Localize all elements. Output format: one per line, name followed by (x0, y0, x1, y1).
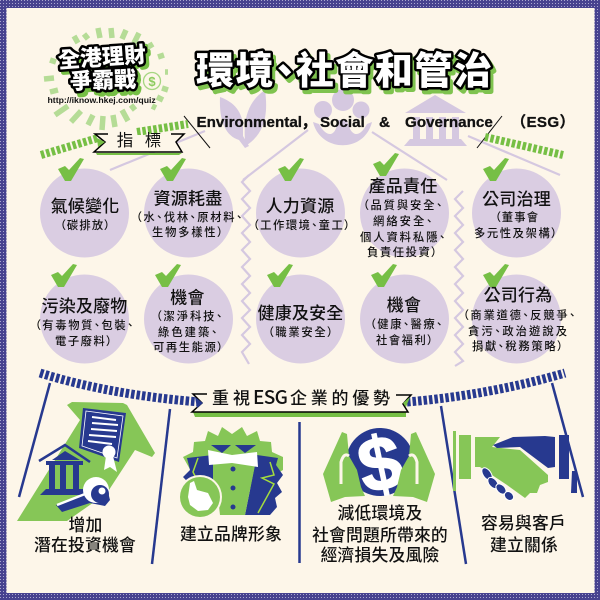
panel: climate change (40, 158, 129, 258)
logo: quiz badge: 爭霸戰 (69, 62, 137, 96)
panel: environmental opportunities (144, 264, 233, 364)
subtitle: environmental social governance: Environmental (196, 114, 302, 131)
icon: tuxedo brand (178, 427, 283, 519)
panel: pollution and waste: （有毒物質、包裝、 (35, 317, 133, 333)
panel: product responsibility: 產品責任 (369, 172, 437, 197)
panel: corporate behaviour: 公司行為 (484, 281, 552, 306)
panel: human resources (253, 158, 350, 258)
navy dashed bars (40, 373, 565, 402)
panel: human resources: 人力資源 (266, 192, 334, 217)
panel: environmental opportunities: （潔淨科技、 (156, 308, 222, 324)
panel: pollution and waste: 電子廢料） (55, 333, 112, 349)
title: 環境、社會和管治 (196, 40, 492, 95)
panel: corporate behaviour: 捐獻、稅務策略） (472, 338, 563, 354)
panel: product responsibility: 負責任投資） (367, 244, 437, 260)
panel: resource depletion: 資源耗盡 (154, 184, 222, 210)
panel: corporate behaviour: （商業道德、反競爭、 (463, 307, 575, 323)
icon: investment arrow (17, 402, 155, 521)
panel: pollution and waste (35, 264, 133, 364)
label: reduce risk: 社會問題所帶來的 (312, 522, 448, 546)
panel: resource depletion: （水、伐林、原材料、 (136, 209, 242, 225)
banner: indicators: 標 (145, 127, 161, 151)
navy divider lines (19, 383, 583, 564)
panel: social opportunities: 機會 (387, 291, 421, 316)
label: client relations (481, 510, 566, 556)
icon: watermark people (313, 89, 372, 145)
certificate (79, 408, 126, 472)
panel: product responsibility: （品質與安全、 (363, 197, 442, 213)
green dashed bars (41, 124, 563, 155)
subtitle: environmental social governance: （ESG） (511, 114, 575, 131)
banner: ESG advantages: ESG (253, 383, 288, 410)
logo: quiz badge: 爭霸戰 (73, 66, 140, 100)
panel: social opportunities: 社會福利） (376, 332, 433, 348)
panel: environmental opportunities: 可再生能源） (153, 339, 223, 355)
panel: corporate behaviour (463, 264, 575, 364)
subtitle: environmental social governance (184, 114, 575, 148)
panel: corporate governance (472, 158, 561, 258)
panel: corporate governance: （董事會 (495, 209, 539, 225)
banner: indicators: 指 (117, 127, 133, 151)
panel: health and safety: （職業安全） (268, 324, 333, 340)
subtitle: environmental social governance: Governance (405, 114, 493, 131)
panel: corporate behaviour: 貪污、政治遊說及 (468, 323, 567, 339)
label: investment (34, 512, 136, 556)
logo: quiz badge (44, 28, 168, 130)
title: 環境、社會和管治 (199, 44, 495, 99)
banner: ESG advantages: 企業的優勢 (290, 384, 390, 409)
subtitle: environmental social governance: & (379, 114, 390, 131)
panel: climate change: 氣候變化 (51, 192, 119, 217)
background roof and zigzag lines (110, 130, 560, 366)
subtitle: environmental social governance: ， (302, 114, 317, 131)
panel: corporate governance: 公司治理 (482, 185, 551, 210)
panel: product responsibility: 個人資料私隱、 (360, 229, 445, 245)
label: brand image: 建立品牌形象 (180, 521, 282, 545)
logo: quiz badge: $ (148, 74, 156, 89)
panel: environmental opportunities: 綠色建築、 (158, 324, 217, 340)
icon: dollar in hands (323, 419, 435, 510)
panel: social opportunities: （健康、醫療、 (370, 316, 442, 332)
logo: quiz badge: http://iknow.hkej.com/quiz (48, 95, 156, 105)
panel: health and safety: 健康及安全 (258, 299, 344, 324)
panel: product responsibility (360, 153, 449, 260)
panel: resource depletion (136, 158, 242, 258)
panel: human resources: （工作環境、童工） (253, 217, 350, 233)
label: reduce risk: 經濟損失及風險 (321, 542, 439, 566)
banner: ESG advantages (192, 383, 411, 417)
logo: quiz badge: 全港理財 (60, 40, 150, 78)
logo: quiz badge: 全港理財 (57, 37, 147, 75)
panel: resource depletion: 生物多樣性） (152, 224, 223, 240)
label: client relations: 建立關係 (490, 532, 558, 556)
panel: environmental opportunities: 機會 (170, 284, 205, 308)
icon: dollar in hands: $ (351, 419, 410, 510)
label: client relations: 容易與客戶 (481, 510, 566, 534)
panel: pollution and waste: 污染及廢物 (42, 292, 128, 317)
bank (39, 445, 90, 495)
label: reduce risk (312, 500, 448, 566)
icon: watermark temple (404, 95, 467, 146)
panel: product responsibility: 網絡安全、 (373, 213, 432, 229)
banner: ESG advantages: 重視 (212, 384, 250, 409)
label: investment: 增加 (69, 512, 102, 536)
banner: indicators (94, 127, 184, 155)
icon: watermark leaf (220, 90, 266, 148)
label: reduce risk: 減低環境及 (338, 500, 422, 524)
icon: handshake (453, 431, 577, 502)
panel: climate change: （碳排放） (60, 217, 110, 233)
subtitle: environmental social governance: Social (320, 114, 365, 131)
panel: corporate governance: 多元性及架構） (474, 225, 557, 241)
panel: social opportunities (360, 264, 449, 364)
label: investment: 潛在投資機會 (34, 532, 136, 556)
key (56, 477, 110, 512)
panel: health and safety (256, 264, 345, 364)
